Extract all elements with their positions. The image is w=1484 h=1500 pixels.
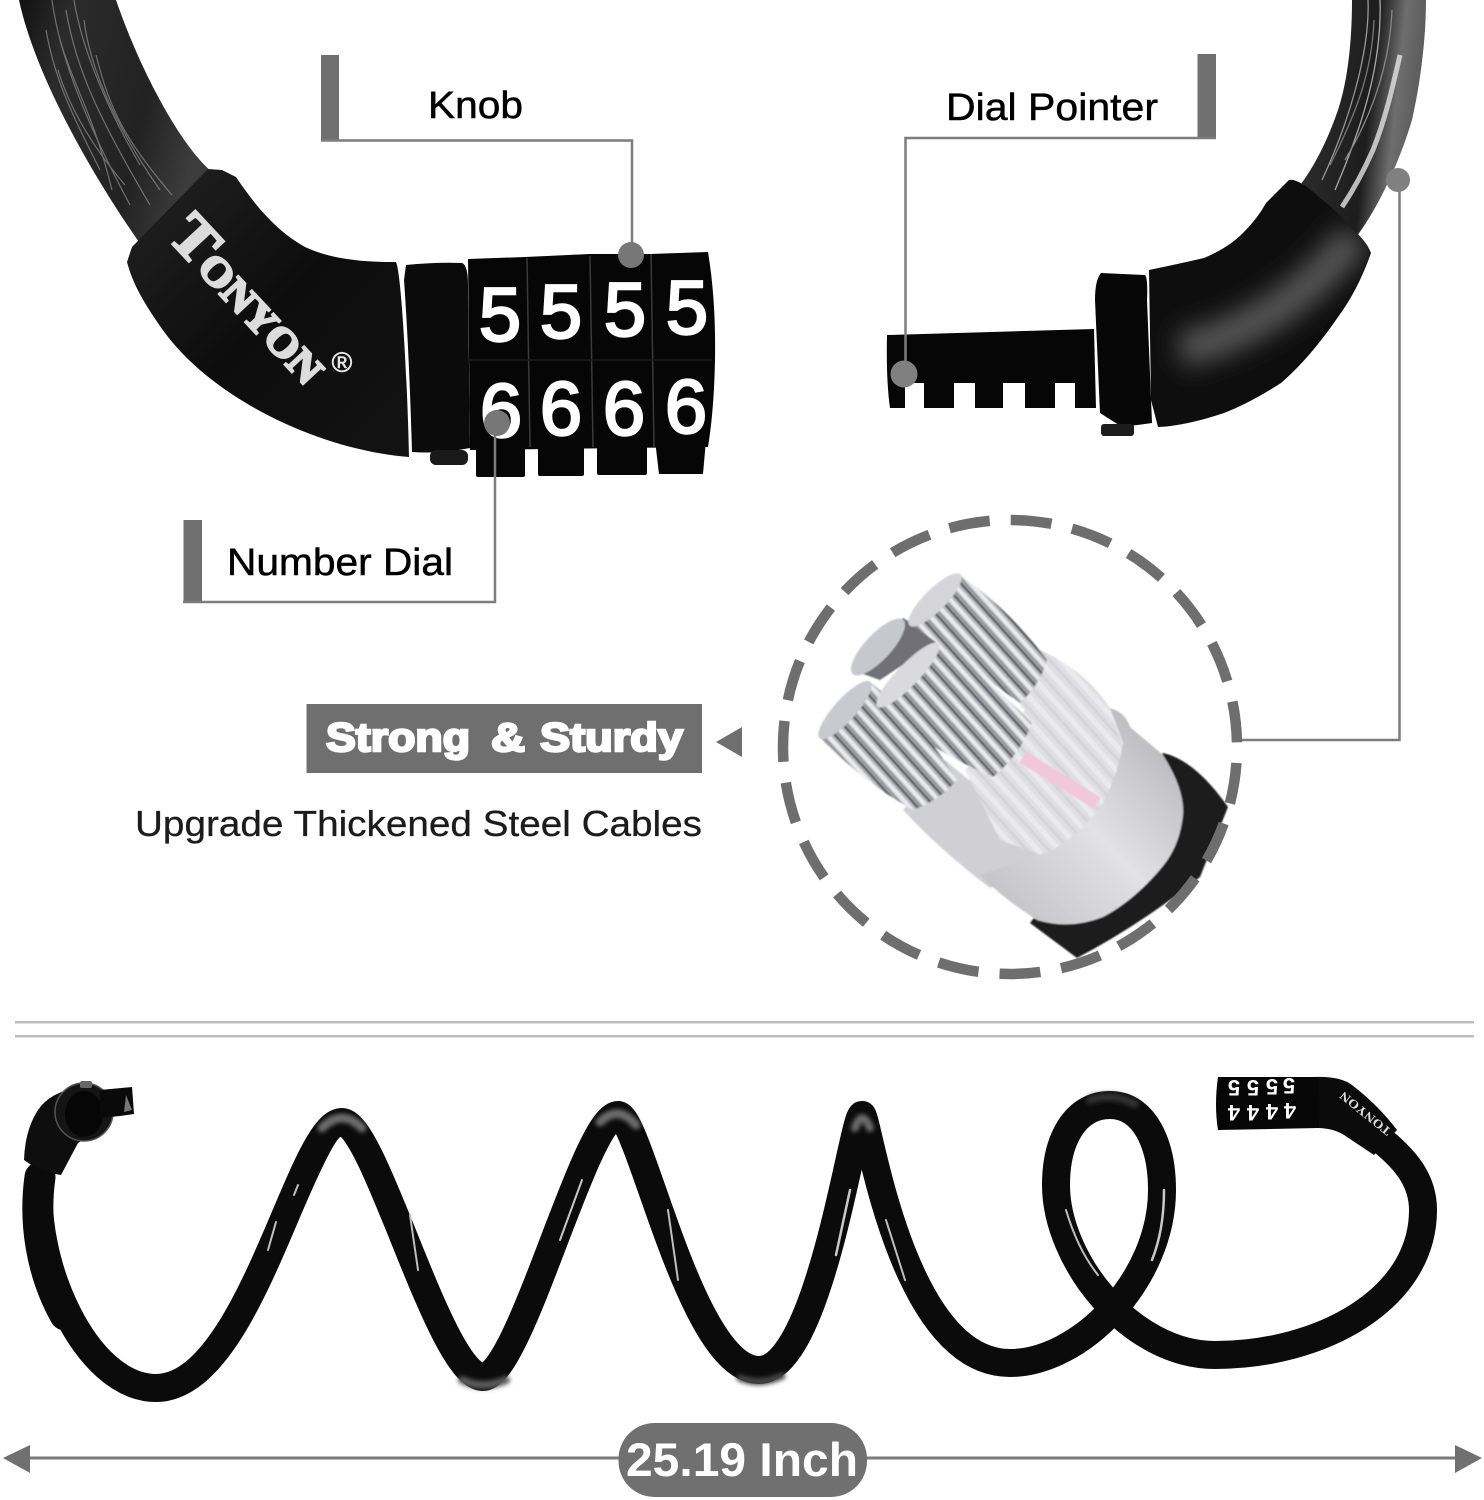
left lock end: [24, 1081, 134, 1175]
sleeve: [1314, 1077, 1397, 1155]
coil thick start: [38, 1177, 65, 1315]
collar tab: [430, 450, 468, 465]
photo: lock key end with cable: [887, 0, 1426, 436]
upside-down digits: 4: [1283, 1098, 1296, 1123]
dot: [890, 360, 918, 388]
pink stripe: [1023, 757, 1097, 803]
banner: [306, 704, 702, 773]
lower insulated core: [903, 760, 1065, 888]
rubber sleeve: [1149, 180, 1371, 427]
text: upgrade description: Upgrade Thickened Steel Cables: [135, 803, 702, 844]
tab: [80, 1081, 92, 1088]
label: Number Dial: [227, 542, 453, 584]
cable strands and highlight: [1322, 0, 1400, 207]
brand text: TONYON: [156, 201, 345, 396]
upside-down digits: 5: [1283, 1073, 1295, 1098]
coil sheen: [322, 1097, 1135, 1385]
label: Dial Pointer: [946, 87, 1158, 129]
number dials: [468, 252, 715, 477]
cable: left upper section: [19, 0, 212, 245]
pill: [618, 1423, 867, 1497]
right lock end: [1216, 1073, 1397, 1155]
silver tube: [980, 708, 1183, 924]
banner text: &: [491, 716, 525, 760]
callout: cable zoom leader: [1236, 168, 1410, 740]
collar: [1095, 273, 1152, 427]
sleeve sheen: [1180, 235, 1355, 350]
upside-down digits: 5: [1266, 1074, 1278, 1099]
collar: [55, 1083, 113, 1141]
digits: 5555: 5: [666, 266, 708, 351]
upside-down digits: [1227, 1073, 1296, 1125]
upside-down digits: 4: [1265, 1099, 1278, 1124]
banner text: Sturdy: [540, 716, 684, 760]
digits: 5555: 5: [604, 268, 646, 353]
digits: 6666: 6: [480, 369, 522, 454]
collar tab: [1101, 424, 1134, 436]
callout: dial pointer: [890, 54, 1216, 388]
bar: [1198, 54, 1216, 139]
digits: 5555: 5: [540, 270, 582, 355]
brand text: TONYON: [1337, 1088, 1394, 1139]
rubber sleeve: [127, 169, 409, 457]
dimension: cable length: [3, 1423, 1482, 1497]
digits: 5555: 5: [479, 273, 521, 358]
dial body: [1216, 1077, 1319, 1130]
collar: [404, 263, 470, 452]
upside-down digits: 4: [1227, 1100, 1240, 1125]
upside-down digits: 4: [1246, 1100, 1259, 1125]
callout: number dial: [183, 410, 510, 603]
leader line: [321, 140, 632, 255]
small back conductor face: [852, 618, 940, 680]
digits: 6666: 6: [603, 367, 645, 452]
label: Knob: [428, 85, 523, 127]
coil body: [39, 1105, 1423, 1388]
key shaft with teeth: [887, 329, 1096, 408]
middle insulated core: [965, 705, 1120, 862]
dimension line: [28, 1456, 1458, 1460]
photo: coiled cable: [24, 1073, 1423, 1388]
callout: knob: [321, 55, 644, 268]
leader line: [1236, 180, 1400, 740]
cable strands: [46, 0, 172, 205]
left conductor: [820, 682, 957, 810]
digits: 5555: [479, 266, 708, 358]
leader line: [183, 423, 495, 602]
photo: lock head with cable and number dials: [19, 0, 715, 477]
bar: [184, 520, 202, 603]
black outer jacket: [1030, 753, 1228, 958]
length text: 25.19 Inch: [626, 1433, 858, 1486]
dot: [484, 410, 510, 436]
upside-down digits: 5: [1247, 1075, 1259, 1100]
heading: strong and sturdy: [306, 704, 702, 773]
key stub: [100, 1087, 134, 1118]
dashed circle: [783, 520, 1237, 974]
cable: right upper section: [1298, 0, 1426, 236]
digits: 6666: 6: [665, 365, 707, 450]
bar: [321, 55, 339, 140]
divider: double rule: [15, 1021, 1474, 1038]
upside-down digits: 5: [1228, 1075, 1240, 1100]
arrow: pointing to banner: [716, 727, 742, 757]
coil highlights: [268, 1180, 1164, 1280]
dot: [618, 242, 644, 268]
registered mark: ®: [332, 347, 353, 378]
right arrowhead: [1455, 1445, 1482, 1473]
rear insulated core: [1020, 650, 1128, 785]
digits: 6666: 6: [540, 367, 582, 452]
dial separators: [470, 254, 712, 447]
front conductor: [877, 642, 1032, 777]
top conductor: [910, 575, 1047, 703]
sleeve: [24, 1087, 110, 1175]
leader line: [906, 138, 1216, 374]
digits: 6666: [480, 365, 707, 454]
dot: [1386, 168, 1410, 192]
banner text: Strong: [326, 716, 470, 760]
left arrowhead: [3, 1445, 30, 1473]
illustration: steel cable cross section: [811, 567, 1228, 958]
